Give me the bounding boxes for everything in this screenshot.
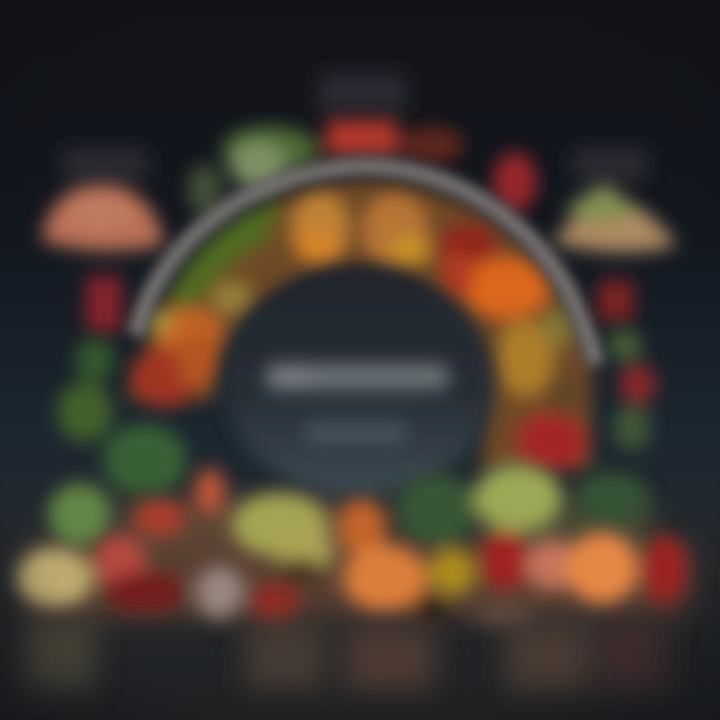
bottom row of fruit and vegetables bbox=[17, 464, 687, 626]
left column of vegetables bbox=[48, 338, 187, 547]
muted backdrop of bottom food pile bbox=[30, 500, 690, 615]
table reflection bbox=[25, 620, 670, 690]
right column of small vegetables bbox=[576, 329, 657, 524]
faint floating labels above the arch bbox=[62, 72, 648, 182]
dark central circle bbox=[223, 268, 495, 496]
left mushroom-shaped food dome bbox=[42, 184, 164, 333]
blurred title bars in the circle bbox=[266, 364, 448, 442]
grey metallic arch bbox=[135, 166, 596, 365]
outer ring of vegetables above the arch bbox=[187, 120, 537, 216]
arch fill: inner food band bbox=[125, 180, 592, 472]
right mushroom-shaped food dome bbox=[552, 182, 676, 322]
